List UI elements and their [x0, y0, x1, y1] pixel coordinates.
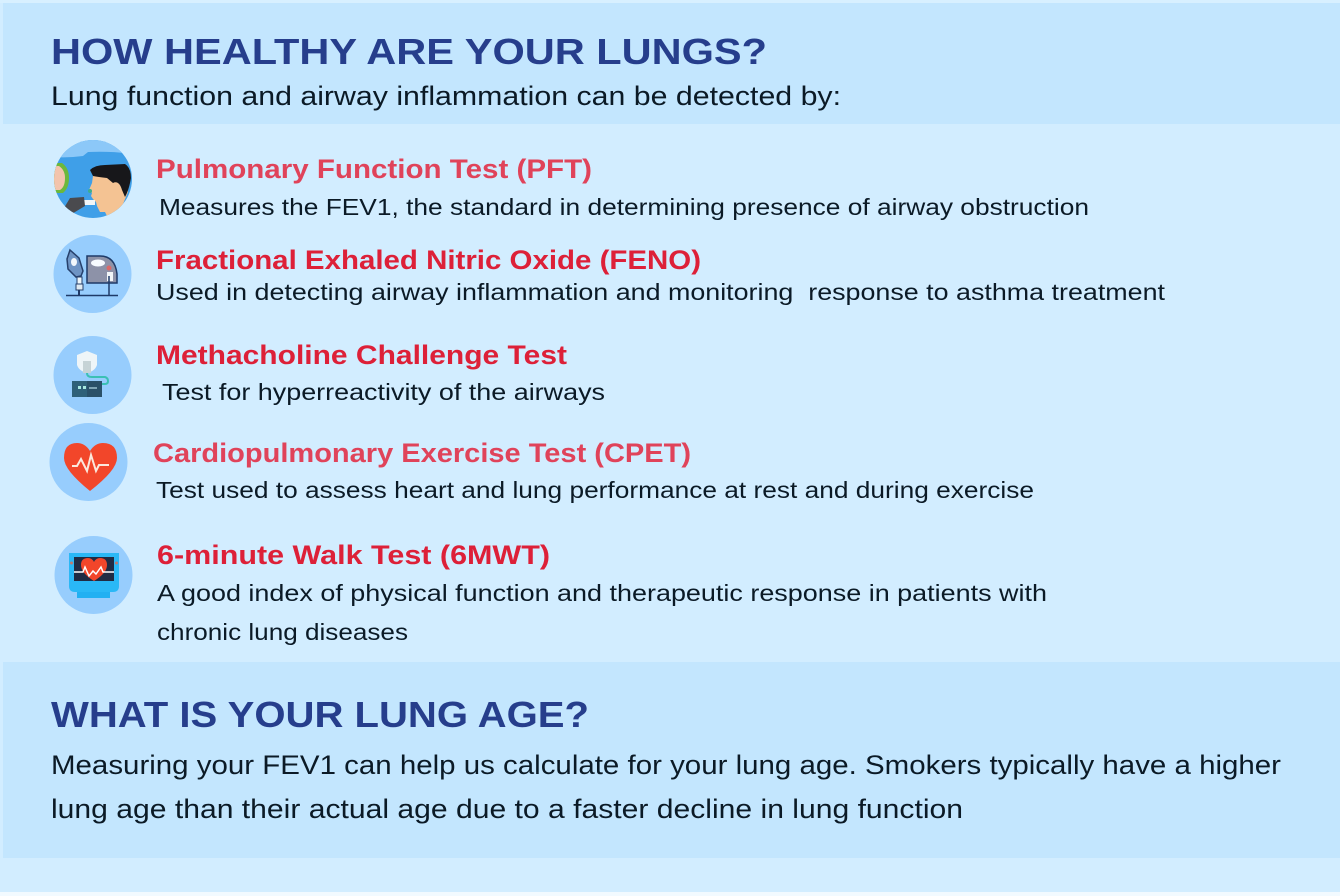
icon: methacholine nebulizer	[54, 336, 132, 414]
text: 6MWT description	[157, 580, 1047, 645]
text: FENO description: Used in detecting airway inflammation and monitoring response to asthma treatment	[156, 279, 1166, 305]
text: Methacholine description: Test for hyperreactivity of the airways	[162, 379, 605, 405]
text: lung age description	[51, 750, 1281, 824]
text: 6MWT description: A good index of physical function and therapeutic response in patients with	[157, 580, 1047, 606]
panel: lung age band	[3, 662, 1340, 858]
icon: FENO machine	[54, 235, 132, 313]
heading: CPET: Cardiopulmonary Exercise Test (CPET)	[153, 438, 691, 468]
icon: heart monitor	[54, 536, 132, 614]
text: lung age description: lung age than their actual age due to a faster decline in lung function	[51, 794, 963, 824]
heading: Methacholine: Methacholine Challenge Test	[156, 340, 567, 370]
subtitle: Lung function and airway inflammation can be detected by:	[51, 81, 841, 111]
heading: lung age: WHAT IS YOUR LUNG AGE?	[51, 694, 589, 735]
icon: person doing spirometry test	[54, 140, 132, 218]
panel: header band	[3, 3, 1340, 124]
icon: heart with pulse	[50, 423, 128, 501]
heading: FENO: Fractional Exhaled Nitric Oxide (FENO)	[156, 245, 701, 275]
text: CPET description: Test used to assess heart and lung performance at rest and during exercise	[156, 477, 1034, 503]
text: lung age description: Measuring your FEV1 can help us calculate for your lung age. Smokers typically have a higher	[51, 750, 1281, 780]
text: PFT description: Measures the FEV1, the standard in determining presence of airway obstruction	[159, 194, 1089, 220]
text: 6MWT description: chronic lung diseases	[157, 619, 408, 645]
heading: PFT: Pulmonary Function Test (PFT)	[156, 154, 592, 184]
title: HOW HEALTHY ARE YOUR LUNGS?	[51, 31, 767, 72]
heading: 6MWT: 6-minute Walk Test (6MWT)	[157, 540, 550, 570]
